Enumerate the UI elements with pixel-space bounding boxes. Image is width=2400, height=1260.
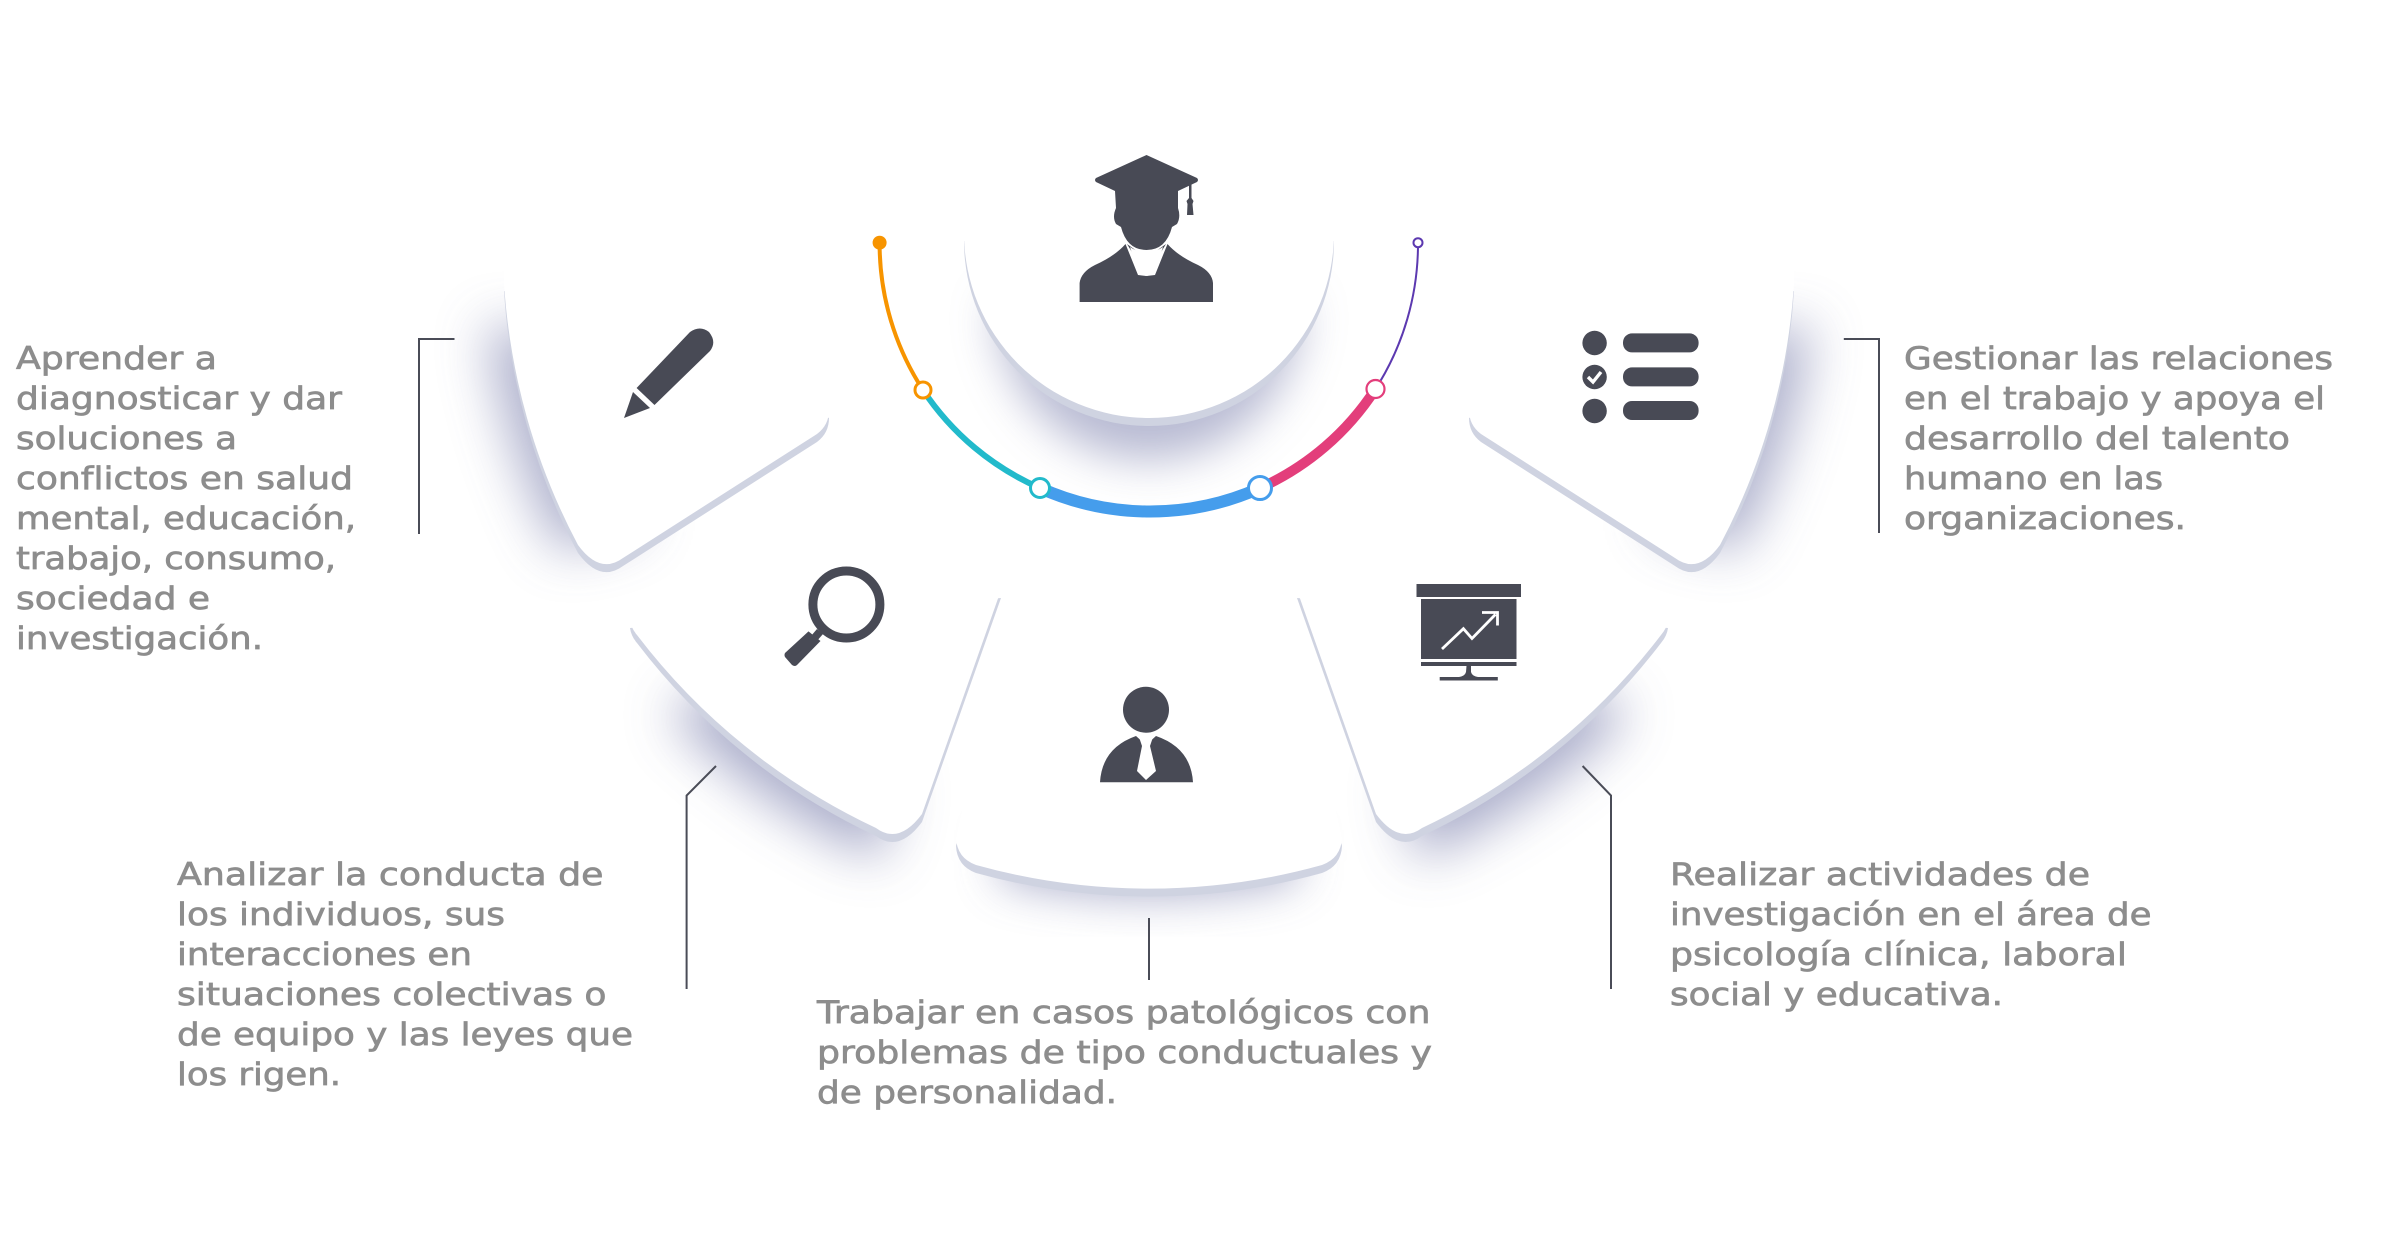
- text block: bottom centre: de personalidad.: [817, 1075, 1117, 1111]
- arc: pink segment: [1260, 389, 1376, 488]
- leader line: lower right: [1583, 766, 1611, 989]
- marker: purple ring: [1414, 238, 1422, 247]
- text block: upper left: diagnosticar y dar: [16, 381, 342, 417]
- text block: lower left: situaciones colectivas o: [177, 977, 606, 1013]
- icon: person with tie: [1100, 687, 1193, 782]
- icon: presentation screen: [1416, 584, 1521, 680]
- text block: upper left: [16, 341, 356, 657]
- panel: person sector (bottom): [956, 600, 1342, 897]
- text block: upper left: trabajo, consumo,: [16, 541, 336, 577]
- marker: orange dot: [873, 236, 887, 250]
- text block: lower right: [1670, 857, 2152, 1013]
- text block: upper right: Gestionar las relaciones: [1904, 341, 2333, 377]
- leader line: bottom: [1148, 918, 1150, 980]
- text block: lower right: psicología clínica, laboral: [1670, 937, 2127, 973]
- arc: cyan segment: [923, 390, 1040, 488]
- text block: bottom centre: problemas de tipo conductuales y: [817, 1035, 1432, 1071]
- text block: upper right: en el trabajo y apoya el: [1904, 381, 2325, 417]
- panel: pencil sector (upper left): [486, 250, 829, 572]
- marker: pink ring: [1366, 380, 1384, 398]
- leader line: upper left: [419, 339, 454, 534]
- marker: orange ring: [915, 382, 931, 398]
- text block: upper right: desarrollo del talento: [1904, 421, 2290, 457]
- text block: lower left: de equipo y las leyes que: [177, 1017, 633, 1053]
- text block: lower left: los individuos, sus: [177, 897, 505, 933]
- text block: upper left: sociedad e: [16, 581, 210, 617]
- text block: bottom centre: [816, 995, 1432, 1111]
- arc: blue segment: [1040, 488, 1260, 512]
- progress arc: [873, 236, 1422, 512]
- icon: pencil: [624, 328, 713, 418]
- leader line: lower left: [687, 766, 716, 989]
- icon: magnifier: [784, 571, 880, 666]
- arc: orange segment: [880, 243, 923, 390]
- text block: lower left: interacciones en: [177, 937, 472, 973]
- text block: lower right: Realizar actividades de: [1670, 857, 2090, 893]
- text block: upper left: Aprender a: [16, 341, 217, 377]
- text block: upper right: [1904, 341, 2333, 537]
- marker: blue ring: [1248, 476, 1272, 500]
- text block: lower right: investigación en el área de: [1670, 897, 2152, 933]
- text block: upper left: soluciones a: [16, 421, 237, 457]
- marker: cyan ring: [1030, 478, 1050, 498]
- panel: centre half disc: [964, 200, 1334, 460]
- text block: bottom centre: Trabajar en casos patológicos con: [816, 995, 1430, 1031]
- arc: purple segment: [1376, 243, 1418, 389]
- text block: lower right: social y educativa.: [1670, 977, 2003, 1013]
- icon: checklist: [1582, 331, 1699, 423]
- panel: presentation sector (lower right): [1297, 590, 1668, 860]
- text block: lower left: [177, 857, 633, 1093]
- text block: lower left: los rigen.: [177, 1057, 341, 1093]
- panel: list sector (upper right): [1469, 250, 1812, 572]
- icon: graduate: [1080, 155, 1213, 302]
- text block: upper left: conflictos en salud: [16, 461, 353, 497]
- text block: lower left: Analizar la conducta de: [177, 857, 604, 893]
- panel: magnifier sector (lower left): [630, 590, 1001, 860]
- leader line: upper right: [1844, 339, 1879, 533]
- text block: upper right: humano en las: [1904, 461, 2163, 497]
- text block: upper left: investigación.: [16, 621, 263, 657]
- text block: upper left: mental, educación,: [16, 501, 356, 537]
- text block: upper right: organizaciones.: [1904, 501, 2186, 537]
